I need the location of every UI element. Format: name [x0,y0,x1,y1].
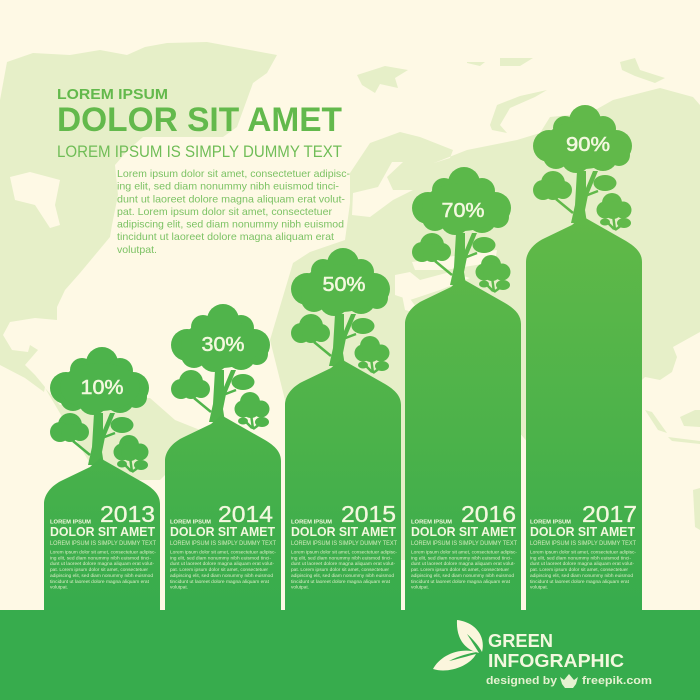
arctic islands [357,58,665,133]
column text: LOREM IPSUM [50,520,91,526]
tree 50%: 50% [322,274,366,296]
column text: LOREM IPSUM [291,520,332,526]
credit: designed by: designed by [486,675,558,687]
bottom green band [0,610,700,700]
intro paragraph: adipiscing elit, sed diam nonummy nibh euismod [117,218,344,230]
column text: 2017 [582,501,637,527]
column text: Lorem ipsum dolor sit amet, consectetuer adipisc- [411,550,517,556]
hill column [44,458,160,610]
north america and greenland [0,42,277,392]
column text: adipiscing elit, sed diam nonummy nibh euismod [50,573,153,579]
column 2016 [405,167,521,610]
tree 90% [533,105,632,230]
column text [411,501,517,591]
credit: freepik.com: freepik.com [582,675,652,687]
column text [291,501,397,591]
column text: dunt ut laoreet dolore magna aliquam erat volut- [50,561,154,567]
intro paragraph: pat. Lorem ipsum dolor sit amet, consectetuer [117,206,333,218]
hill column [285,359,401,610]
logo word: green: GREEN [488,630,553,651]
title block [57,86,351,256]
column text: volutpat. [291,585,309,591]
world map [0,42,700,560]
intro paragraph: volutpat. [117,244,157,256]
column text: adipiscing elit, sed diam nonummy nibh euismod [291,573,394,579]
column text: DOLOR SIT AMET [170,525,275,539]
south america [45,388,200,480]
column text: Lorem ipsum dolor sit amet, consectetuer adipisc- [170,550,276,556]
column 2014 [165,304,281,610]
column text [170,501,276,591]
column text: dunt ut laoreet dolore magna aliquam erat volut- [411,561,515,567]
tree 10%: 10% [80,377,124,399]
column text: volutpat. [50,585,68,591]
column text: adipiscing elit, sed diam nonummy nibh euismod [170,573,273,579]
column text: DOLOR SIT AMET [530,525,635,539]
column text: adipiscing elit, sed diam nonummy nibh euismod [530,573,633,579]
africa [270,255,525,560]
column text: DOLOR SIT AMET [291,525,396,539]
column text: ing elit, sed diam nonummy nibh euismod tinci- [411,555,512,561]
australia edge [693,488,700,530]
column text: adipiscing elit, sed diam nonummy nibh euismod [411,573,514,579]
column text: LOREM IPSUM IS SIMPLY DUMMY TEXT [291,541,397,547]
column text: tincidunt ut laoreet dolore magna aliquam erat [291,579,391,585]
hill column [405,278,521,610]
icon: leaves [433,620,483,671]
column text: 2013 [100,501,155,527]
column text: tincidunt ut laoreet dolore magna aliquam erat [411,579,511,585]
heading: lorem ipsum: LOREM IPSUM [57,86,168,103]
column text: 2014 [218,501,273,527]
column text: volutpat. [530,585,548,591]
column text: pat. Lorem ipsum dolor sit amet, consectetuer [530,567,628,573]
subheading: LOREM IPSUM IS SIMPLY DUMMY TEXT [57,143,342,161]
column text: ing elit, sed diam nonummy nibh euismod tinci- [170,555,271,561]
column text: 2015 [341,501,396,527]
black sea [412,250,497,270]
column text: tincidunt ut laoreet dolore magna aliquam erat [170,579,270,585]
intro paragraph: dunt ut laoreet dolore magna aliquam erat volut- [117,193,346,205]
column text: pat. Lorem ipsum dolor sit amet, consectetuer [291,567,389,573]
column text: DOLOR SIT AMET [411,525,516,539]
column text: dunt ut laoreet dolore magna aliquam erat volut- [170,561,274,567]
column text: pat. Lorem ipsum dolor sit amet, consectetuer [411,567,509,573]
column text: LOREM IPSUM [170,520,211,526]
column text: dunt ut laoreet dolore magna aliquam erat volut- [530,561,634,567]
hill column [165,415,281,610]
column text: Lorem ipsum dolor sit amet, consectetuer adipisc- [291,550,397,556]
column text: tincidunt ut laoreet dolore magna aliquam erat [50,579,150,585]
tree 30%: 30% [202,334,245,356]
column text: LOREM IPSUM IS SIMPLY DUMMY TEXT [170,541,276,547]
column text: Lorem ipsum dolor sit amet, consectetuer adipisc- [50,550,156,556]
eurasia [293,88,700,480]
column text: LOREM IPSUM IS SIMPLY DUMMY TEXT [530,541,636,547]
column text: ing elit, sed diam nonummy nibh euismod tinci- [50,555,151,561]
column text: LOREM IPSUM [530,520,571,526]
icon: freepik mascot [560,674,578,688]
tree 50% [291,248,390,373]
intro paragraph [117,168,351,256]
tree 70% [412,167,511,292]
column text: volutpat. [411,585,429,591]
column text: LOREM IPSUM IS SIMPLY DUMMY TEXT [411,541,517,547]
column text [530,501,637,591]
tree 30% [171,304,270,429]
column text: LOREM IPSUM IS SIMPLY DUMMY TEXT [50,541,156,547]
hill column [526,216,642,610]
tree 70%: 70% [442,200,485,222]
column text: volutpat. [170,585,188,591]
column text: ing elit, sed diam nonummy nibh euismod tinci- [291,555,392,561]
mediterranean sea [395,272,470,300]
column text: pat. Lorem ipsum dolor sit amet, consectetuer [170,567,268,573]
column text: pat. Lorem ipsum dolor sit amet, consectetuer [50,567,148,573]
tree 90%: 90% [566,134,610,156]
column 2017 [526,105,642,610]
column text: LOREM IPSUM [411,520,452,526]
column 2013 [44,347,160,610]
intro paragraph: Lorem ipsum dolor sit amet, consectetuer adipisc- [117,168,351,180]
heading: dolor sit amet: DOLOR SIT AMET [57,101,342,139]
column text: ing elit, sed diam nonummy nibh euismod tinci- [530,555,631,561]
column 2015 [285,248,401,610]
logo [433,620,652,688]
column text: DOLOR SIT AMET [50,525,155,539]
column text: 2016 [461,501,516,527]
logo word: infographic: INFOGRAPHIC [488,650,624,671]
column text: dunt ut laoreet dolore magna aliquam erat volut- [291,561,395,567]
tree 10% [50,347,149,472]
column text [50,501,156,591]
column text: tincidunt ut laoreet dolore magna aliquam erat [530,579,630,585]
intro paragraph: tincidunt ut laoreet dolore magna aliquam erat [117,231,334,243]
column text: Lorem ipsum dolor sit amet, consectetuer adipisc- [530,550,636,556]
intro paragraph: ing elit, sed diam nonummy nibh euismod tinci- [117,181,340,193]
southeast asia islands [645,410,700,444]
